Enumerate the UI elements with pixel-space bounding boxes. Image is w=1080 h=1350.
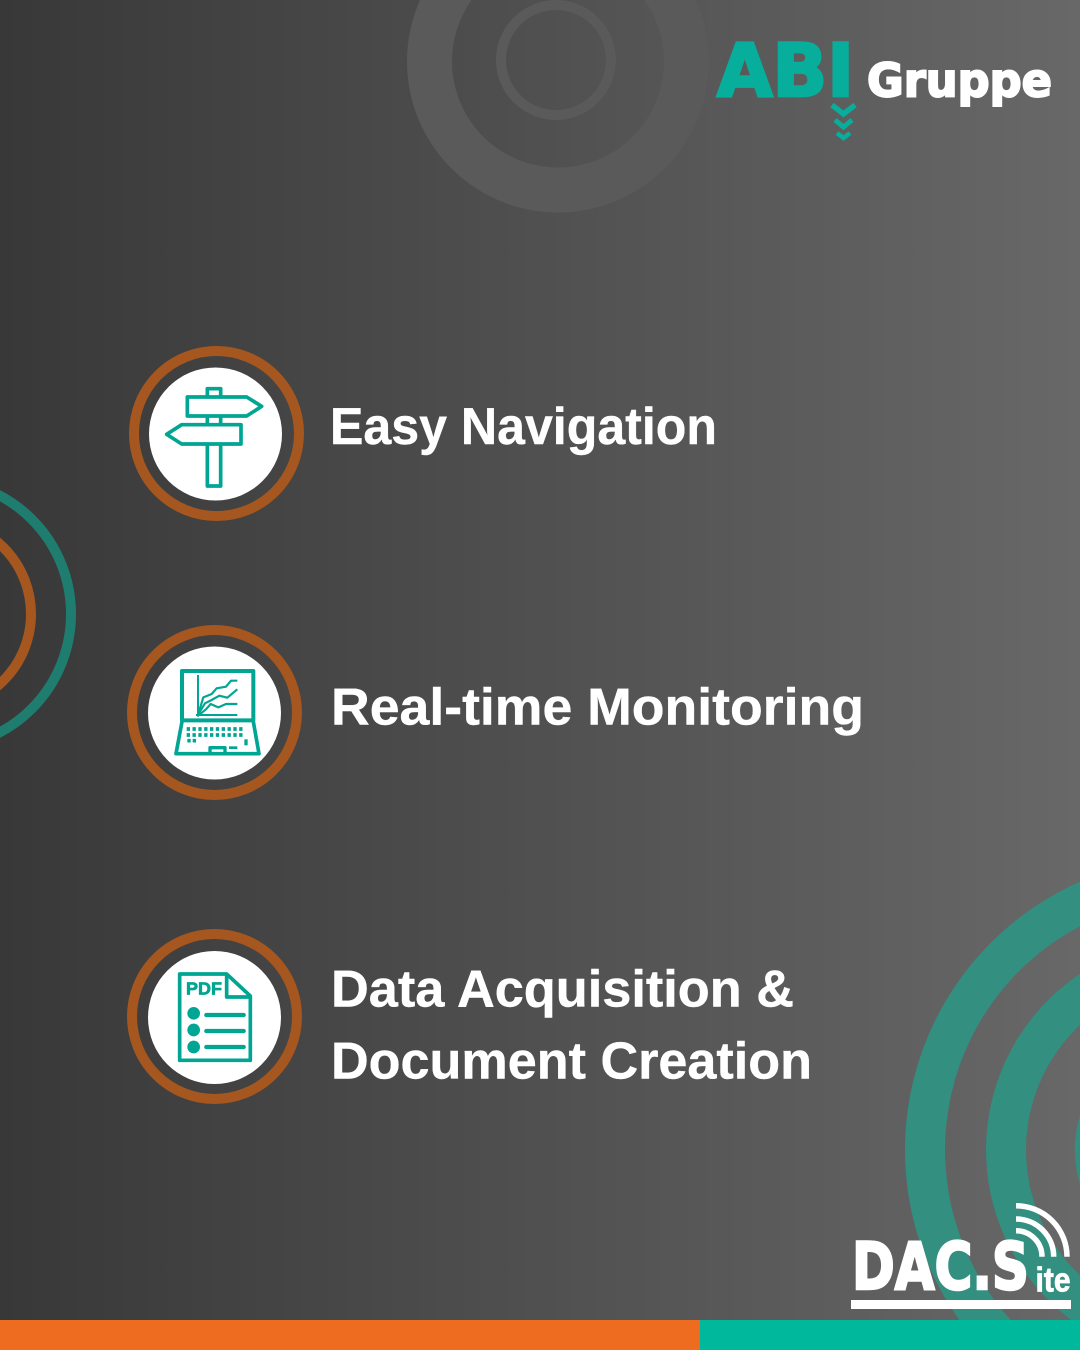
- icon: signpost: [167, 389, 262, 486]
- icon ring: [134, 351, 299, 516]
- label line 1: Data Acquisition &: [331, 960, 794, 1018]
- decorative concentric rings top: [430, 0, 686, 190]
- icon: PDF document: PDF: [186, 978, 222, 998]
- icon ring: [132, 630, 297, 795]
- logo wordmark Gruppe: Gruppe: [867, 54, 1052, 108]
- feature: Data Acquisition and Document Creation: [132, 934, 812, 1099]
- logo: ABI Gruppe: [717, 29, 1052, 138]
- icon: white disc: [148, 646, 281, 780]
- logo signal waves: [1016, 1206, 1067, 1257]
- icon: white disc: [149, 368, 282, 500]
- label: Easy Navigation: [330, 398, 717, 456]
- logo wordmark ite: ite: [1036, 1262, 1070, 1300]
- label: Real-time Monitoring: [331, 678, 864, 736]
- logo wordmark DAC.S: DAC.S: [852, 1230, 1029, 1305]
- decorative concentric rings left: [0, 480, 71, 748]
- icon ring: [132, 934, 297, 1099]
- feature: Easy Navigation: [134, 351, 717, 516]
- logo: DACSite: [851, 1206, 1071, 1309]
- footer bar orange: [0, 1320, 700, 1350]
- feature: Real-time Monitoring: [132, 630, 864, 795]
- footer bar teal: [700, 1320, 1080, 1350]
- logo underline: [851, 1300, 1071, 1309]
- logo wordmark ABI: ABI: [717, 29, 854, 114]
- decorative concentric rings bottom right: [905, 882, 1080, 1326]
- icon: laptop with chart: [176, 671, 259, 754]
- icon: white disc: [148, 951, 281, 1084]
- logo chevrons: [832, 105, 855, 138]
- icon: PDF document: [180, 974, 250, 1060]
- label line 2: Document Creation: [331, 1032, 812, 1090]
